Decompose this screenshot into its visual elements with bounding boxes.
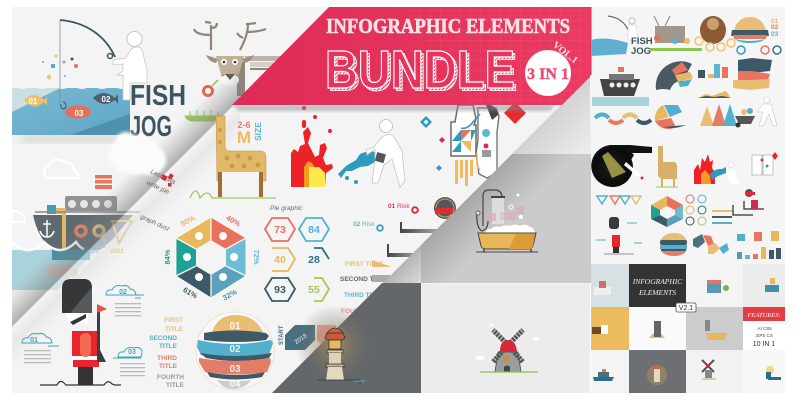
panel: gray fold above bath tile	[512, 76, 591, 154]
tile: features: 10 IN 1	[753, 341, 775, 348]
panel: bath tile	[421, 154, 591, 283]
red dots	[161, 173, 174, 186]
icon: flower 01	[202, 80, 218, 97]
tile: castle	[591, 264, 629, 307]
thumbnail: round chart	[655, 105, 686, 129]
thumbnail: deer	[650, 16, 702, 51]
sphere labels: TITLE	[165, 326, 184, 333]
tile: shop	[686, 264, 743, 307]
cloud 03 note	[113, 347, 145, 376]
cloud 02 note: 02	[119, 289, 127, 296]
fish 02: 02	[102, 95, 111, 104]
handwritten notes	[139, 168, 177, 233]
rocket drips	[455, 160, 473, 186]
note: pie graphic: Pie graphic	[270, 205, 303, 212]
thumbnail: fire	[694, 154, 739, 184]
decorative diamonds	[420, 102, 526, 171]
badge: version	[676, 303, 696, 312]
water	[12, 250, 96, 290]
cloud 02 note	[106, 285, 144, 316]
handwritten notes: Last data	[149, 168, 177, 186]
ground	[480, 371, 538, 373]
ship deck	[35, 196, 140, 250]
hexagon 93: 93	[274, 284, 286, 296]
rifle	[97, 312, 106, 362]
thumbnail: timeline hexagons	[693, 234, 729, 254]
tile: infographic elements title: ELEMENTS	[638, 288, 676, 297]
spots	[218, 128, 260, 168]
panel: number hexagons	[265, 218, 329, 301]
thumbnail: wave chain	[595, 114, 651, 123]
tile: features	[743, 307, 785, 350]
hexagon percentages: 84%	[163, 249, 172, 265]
tile: cargo	[591, 350, 629, 393]
hexagon percentages: 40%	[224, 213, 242, 229]
thumbnail: pointed markers	[700, 104, 737, 126]
panel: main collage background	[12, 7, 590, 393]
panel: thumbnails middle group	[591, 145, 781, 259]
banner shadow	[232, 105, 555, 111]
astronaut head	[434, 197, 456, 219]
shower	[477, 190, 502, 231]
thumbnail: guard	[596, 217, 642, 254]
panel: sphere chart: 04	[229, 379, 241, 390]
thumbnail: small bar charts	[737, 231, 781, 259]
icon: royal guard	[40, 279, 121, 385]
size label: M	[237, 128, 251, 147]
thumbnail: hexagon	[651, 196, 683, 227]
panel: timeline hexagons: START	[279, 325, 285, 345]
panel: red title banner	[232, 7, 590, 105]
ground	[40, 381, 121, 385]
panel: lighthouse tile	[272, 283, 421, 393]
fog cloud	[109, 132, 166, 175]
panel: timeline hexagons: 2018	[294, 333, 309, 346]
panel shadow	[20, 136, 125, 142]
panel: sphere chart: 01	[229, 321, 241, 332]
panel: title list: SECOND TITLE	[340, 276, 388, 283]
fish 03: 03	[75, 109, 84, 118]
panel: title list	[340, 260, 392, 315]
thumbnail: triangles row	[597, 196, 641, 204]
panel: fold beside bath tile	[383, 245, 421, 283]
thumbnail: wheelbarrow	[735, 97, 777, 128]
title: infographic elements: INFOGRAPHIC ELEMENTS	[326, 14, 570, 38]
sphere labels: TITLE	[166, 382, 185, 389]
antlers	[194, 22, 266, 50]
thumbnail: fishing: JOG	[631, 46, 651, 57]
triangle 2021: 2021	[110, 249, 124, 255]
heading: fishing: JOG	[130, 111, 172, 143]
name pill	[46, 265, 78, 277]
tile: features: .AI CS5	[756, 326, 772, 331]
thumbnail: risk figure	[712, 189, 764, 224]
thumbnail: bar and area charts	[698, 64, 732, 98]
thumbnail: wedge chart	[656, 61, 693, 90]
thumbnail: dome chart: 02	[771, 24, 779, 31]
thumbnail: dome chart	[731, 17, 781, 54]
windmill tower	[495, 352, 521, 372]
tub	[478, 233, 536, 249]
handwritten notes: write pie	[145, 179, 170, 196]
icon: lighthouse	[295, 305, 375, 385]
size label	[237, 120, 263, 147]
badge: version: V2.1	[679, 305, 693, 312]
thumbnail: stair blocks	[733, 58, 772, 90]
icon: anchor	[40, 220, 54, 237]
rear astronaut	[476, 105, 499, 178]
handwritten notes: graph dust	[139, 213, 171, 233]
thumbnail: dome chart: 01	[771, 18, 779, 25]
icon: fisherman	[113, 32, 147, 100]
front astronaut	[451, 105, 480, 156]
hexagon 40: 40	[274, 254, 286, 266]
ground	[190, 191, 276, 198]
thumbnail: fishing: FISH	[631, 36, 653, 47]
hexagon 73: 73	[274, 224, 286, 236]
waves	[12, 242, 84, 250]
tile: lighthouse	[629, 350, 686, 393]
thumbnail: sphere	[660, 233, 687, 256]
tile: windmill	[686, 350, 743, 393]
thumbnail: turkey	[695, 16, 735, 51]
hexagon 84: 84	[308, 224, 320, 236]
grass	[185, 110, 223, 121]
panel: ship illustration	[12, 196, 140, 290]
cloud 01 note: 01	[30, 337, 38, 344]
hexagon percentages: 90%	[179, 213, 197, 228]
ledge 1	[400, 222, 440, 233]
badge label: vol 1: VOL.1	[550, 40, 580, 66]
panel: title list: THIRD TITLE	[344, 292, 384, 299]
foam	[485, 224, 535, 233]
panel: title list: FOURTH	[341, 308, 368, 315]
head	[206, 55, 254, 86]
tile: rocket	[629, 307, 686, 350]
icon: pixel fire	[291, 106, 333, 187]
title: bundle: BUNDLE	[325, 40, 515, 100]
triangle 2021	[85, 221, 132, 255]
body	[237, 56, 285, 96]
cloud left	[12, 211, 25, 222]
sphere labels: THIRD	[157, 355, 177, 362]
neck and body	[216, 116, 266, 181]
ledge 2	[387, 244, 420, 257]
flag	[97, 304, 107, 313]
tile: features: FEATURES:	[746, 312, 781, 319]
thumbnail: dome chart: 03	[771, 31, 779, 38]
ship hull	[33, 215, 133, 250]
sphere labels	[149, 317, 185, 389]
water column	[492, 198, 504, 224]
lower hull	[52, 248, 90, 260]
tile: yellow	[591, 307, 629, 350]
water tiles	[488, 206, 524, 221]
icon: firefighter	[366, 120, 405, 187]
life rings	[76, 226, 104, 236]
thumbnail: number rings	[686, 195, 706, 225]
teal ribbon	[94, 238, 105, 247]
icon: astronauts	[451, 105, 499, 186]
thumbnail: ship	[592, 67, 649, 106]
thumbnail: astronauts	[752, 152, 778, 175]
icon: giraffe	[190, 116, 276, 198]
panel: fishing illustration	[12, 20, 147, 142]
tile: infographic elements title: INFOGRAPHIC	[632, 277, 683, 286]
size label: SIZE	[253, 122, 263, 141]
legs	[218, 172, 263, 197]
roof	[500, 340, 517, 352]
panel: risk list	[353, 197, 456, 257]
thumbnail: giraffe	[656, 146, 678, 187]
sphere labels: TITLE	[159, 363, 178, 370]
fishing line and rod	[60, 20, 115, 109]
sphere labels: SECOND	[149, 335, 177, 342]
cloud 03 note: 03	[128, 349, 136, 356]
icon: bathtub	[476, 190, 538, 252]
sphere labels: FIRST	[164, 317, 183, 324]
face	[66, 313, 88, 324]
stack icon	[95, 175, 112, 189]
hexagon percentages: 32%	[221, 287, 239, 302]
white cloud	[44, 160, 78, 178]
panel: timeline hexagons	[279, 325, 336, 350]
thumbnail: fishing	[591, 16, 653, 57]
thumbnail: space	[591, 145, 652, 187]
tile: bath	[686, 307, 743, 350]
panel: windmill tile	[422, 284, 590, 393]
cloud 01 note	[22, 333, 59, 363]
confetti dots	[42, 54, 78, 79]
panel: title list: FIRST TITLE	[345, 261, 384, 268]
hexagon 28: 28	[308, 254, 320, 266]
fold band across ship	[12, 60, 240, 368]
panel: hexagon chart	[163, 213, 261, 302]
hexagon percentages: 72%	[252, 249, 261, 265]
fish 01: 01	[29, 97, 38, 106]
risk 01: 01 Risk	[388, 203, 410, 210]
tile: features: .EPS CS	[755, 333, 773, 338]
title: bundle: BUNDLE	[328, 42, 518, 102]
hexagon 55: 55	[308, 284, 320, 296]
panel: sphere chart: 03	[229, 364, 241, 375]
sphere labels: TITLE	[159, 343, 178, 350]
tile: infographic elements title	[629, 264, 686, 307]
hat	[62, 279, 92, 313]
heading: fishing: FISH	[130, 80, 186, 112]
icon: water spray	[338, 151, 375, 184]
sphere labels: FOURTH	[157, 374, 184, 381]
legs	[78, 367, 93, 385]
hexagon percentages: 61%	[181, 285, 199, 301]
tile: toaster	[743, 264, 785, 307]
triangle 2021: 2020	[85, 249, 99, 255]
badge: 3 in 1: 3 IN 1	[527, 66, 569, 83]
icon: windmill	[475, 324, 539, 372]
panel: sphere chart	[196, 312, 274, 390]
hexagon percentages	[163, 213, 261, 302]
panel: thumbnails top group	[590, 7, 785, 264]
size label: 2-6	[237, 120, 251, 130]
tile: sunrise	[743, 350, 785, 393]
risk 02: 02 Risk	[353, 221, 375, 228]
badge: 3 in 1	[525, 50, 571, 96]
heading: fishing	[130, 80, 186, 143]
panel: thumbnails bottom grid	[591, 264, 785, 393]
blades	[493, 330, 523, 362]
icon: deer	[194, 22, 285, 96]
coat	[72, 331, 100, 356]
panel: sphere chart: 02	[229, 344, 241, 355]
water	[12, 78, 132, 135]
